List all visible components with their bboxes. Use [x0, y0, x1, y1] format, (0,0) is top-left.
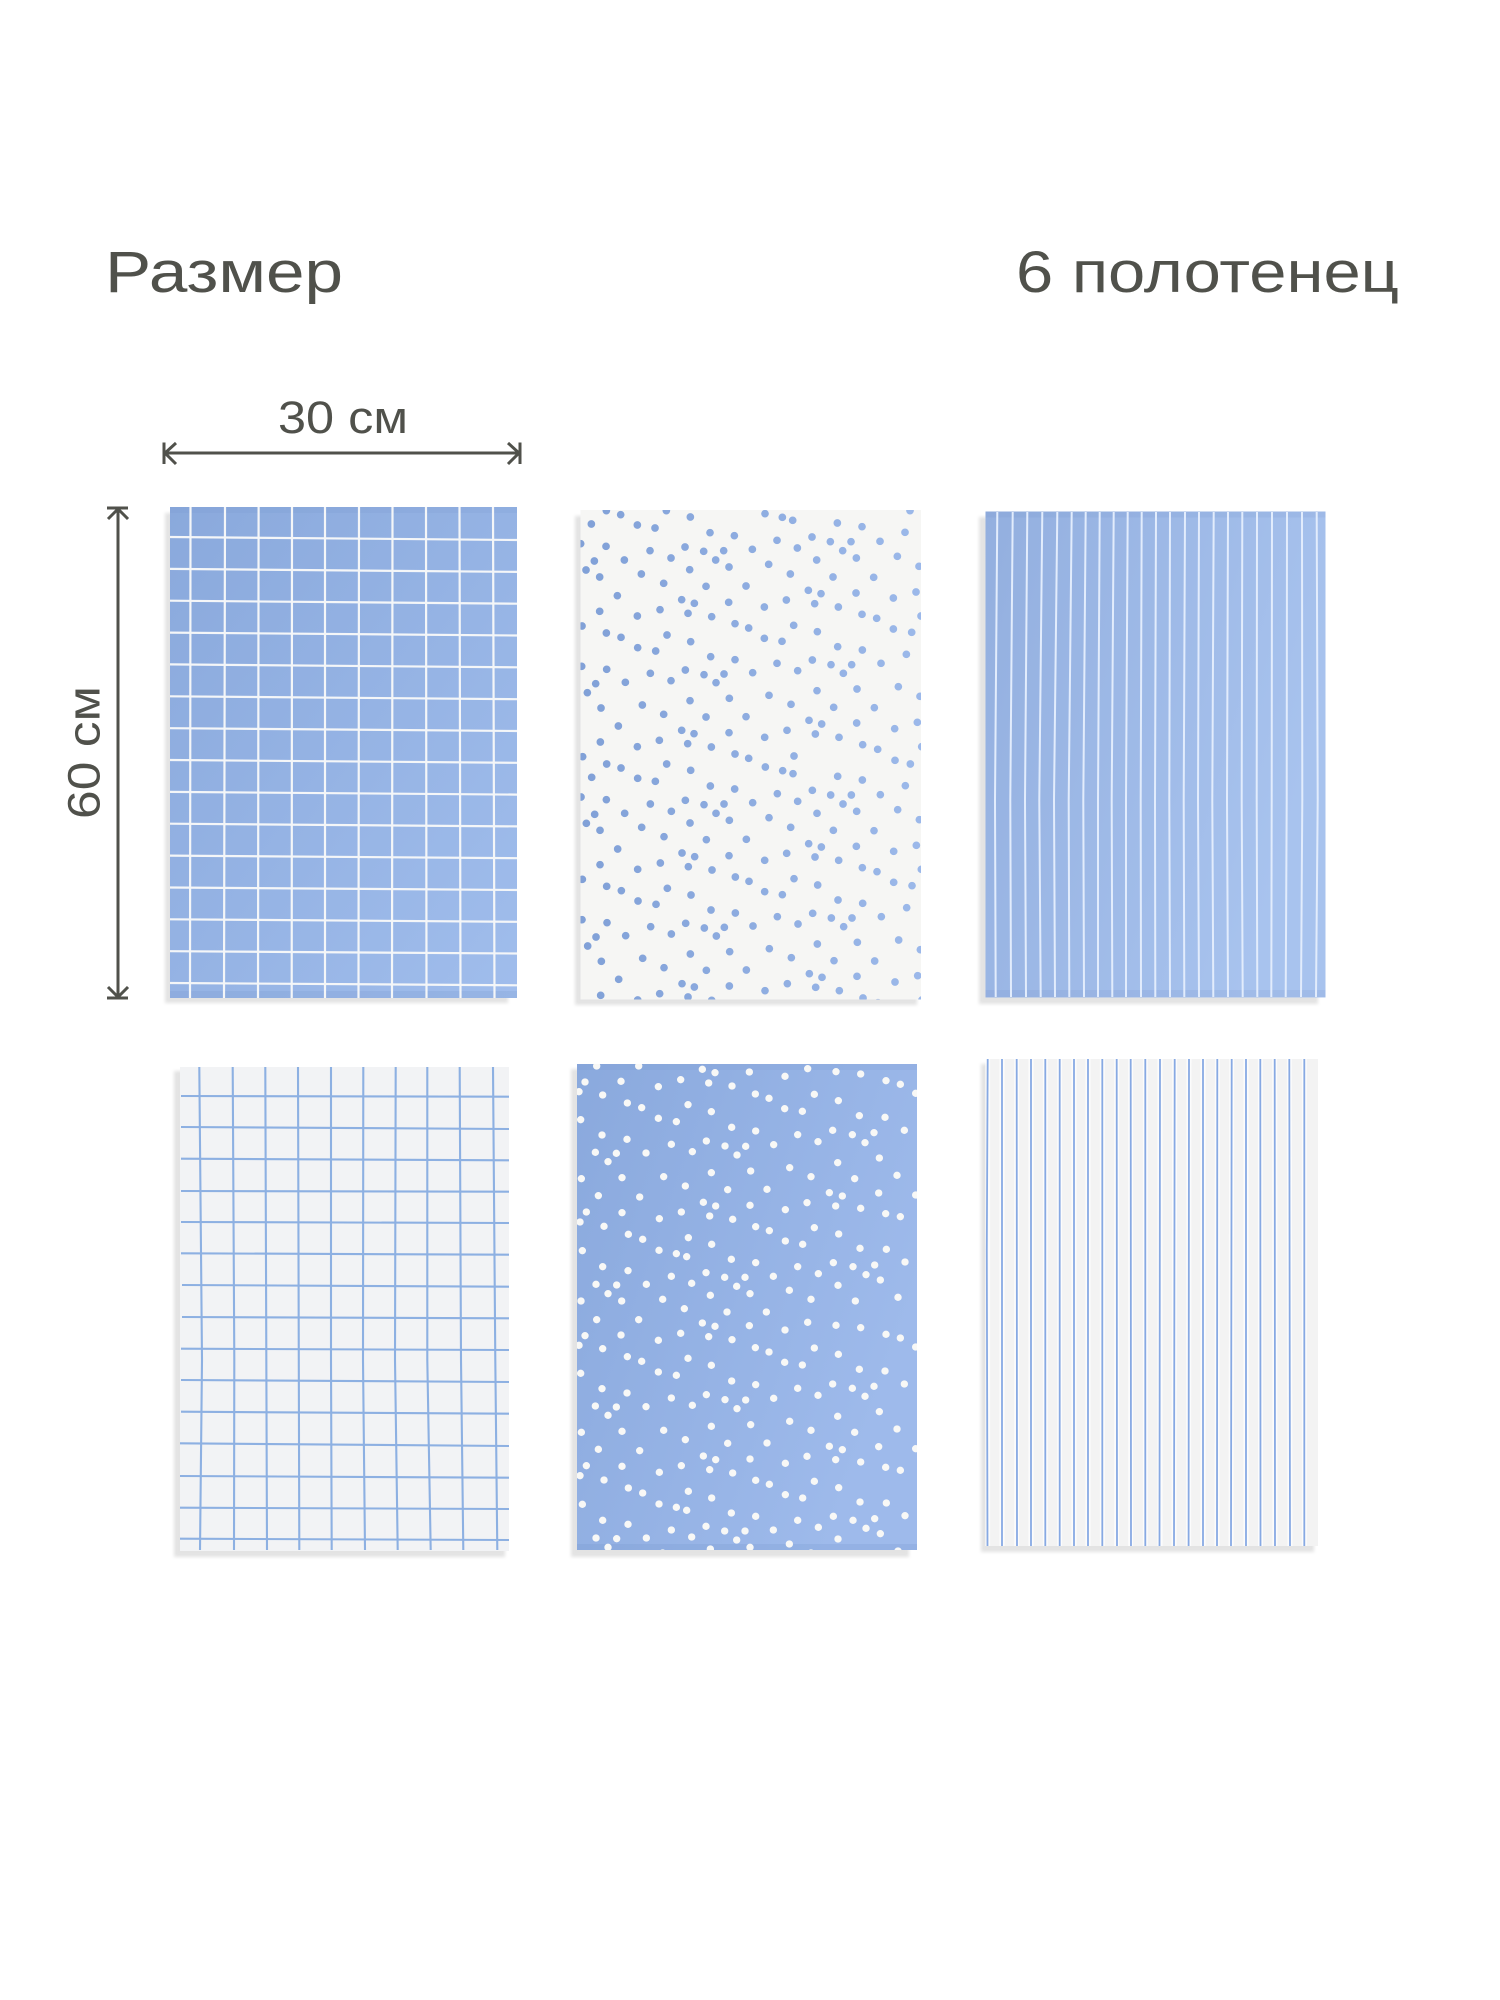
title: six towels: 6 полотенец: [1016, 240, 1399, 305]
towel 4 grid lines: [180, 1067, 509, 1550]
towel 6 stripes: [987, 1059, 1304, 1546]
towel 5: blue with white dots: [571, 1064, 917, 1566]
towel 6 fabric: [987, 1059, 1318, 1546]
towel 2: white with blue dots: [575, 510, 922, 1014]
towel 3 stripes: [995, 512, 1318, 997]
towel 6 stripe highlights: [988, 1059, 1304, 1546]
towel 1: blue with white grid: [165, 507, 517, 1003]
towel 5 dot pattern: [579, 1066, 916, 1566]
towel 5 fabric: [577, 1064, 917, 1550]
towel 2 fabric: [580, 510, 921, 1000]
towel 1 fabric: [170, 507, 517, 998]
arrow: width dimension: [164, 442, 520, 464]
arrow: height dimension: [107, 508, 128, 998]
infographic canvas: [68, 251, 1398, 1558]
height label: 60 см: [58, 686, 110, 819]
title: size: Размер: [105, 240, 343, 305]
width label: 30 см: [278, 392, 408, 443]
towel 3: blue with white stripes: [979, 512, 1326, 1004]
towel 4 fabric: [180, 1067, 509, 1551]
towel 1 grid lines: [170, 507, 517, 998]
towel 2 dot pattern: [581, 511, 922, 1014]
towel 3 fabric: [986, 512, 1326, 998]
towel 4: white with blue grid: [174, 1067, 509, 1557]
towel 6: white with blue stripes: [981, 1059, 1318, 1552]
